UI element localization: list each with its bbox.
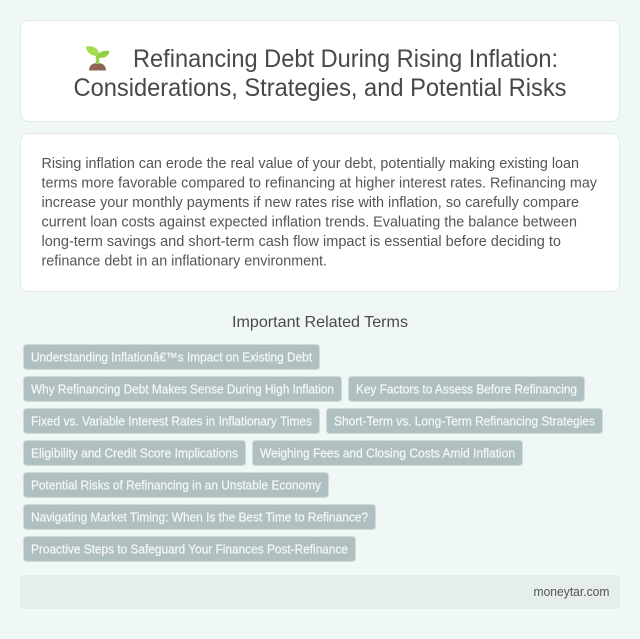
tag: eligibility (24, 440, 246, 466)
title text: Refinancing Debt During Rising Inflation: (133, 45, 558, 73)
summary paragraph: long-term savings and short-term cash flow impact is essential before deciding to (42, 233, 561, 250)
tag: proactive steps: Proactive Steps to Safeguard Your Finances Post-Refinance (31, 542, 348, 556)
panel: title card (20, 20, 620, 122)
tag: weighing fees: Weighing Fees and Closing Costs Amid Inflation (260, 446, 515, 460)
panel: related terms tags (24, 344, 602, 562)
icon: sprout (86, 46, 110, 70)
tag: key factors (348, 376, 584, 402)
tag: eligibility: Eligibility and Credit Score Implications (31, 446, 238, 460)
tag: fixed vs variable (24, 408, 320, 434)
summary paragraph: Rising inflation can erode the real value of your debt, potentially making existing loan (42, 155, 579, 172)
panel: summary card (20, 134, 620, 292)
tag: understanding inflation: Understanding Inflationâ€™s Impact on Existing Debt (31, 350, 312, 364)
tag: potential risks (24, 472, 328, 498)
summary paragraph: increase your monthly payments if new rates rise with inflation, so carefully compare (42, 194, 579, 211)
tag: fixed vs variable: Fixed vs. Variable Interest Rates in Inflationary Times (31, 414, 312, 428)
heading: important related terms: Important Related Terms (232, 314, 408, 331)
summary paragraph (42, 155, 597, 270)
tag: proactive steps (24, 536, 356, 562)
tag: why refinancing (24, 376, 342, 402)
footer bar: moneytar.com (534, 585, 610, 599)
summary paragraph: refinance debt in an inflationary environment. (42, 252, 327, 270)
tag: short vs long term (326, 408, 602, 434)
tag: understanding inflation (24, 344, 320, 370)
tag: navigating timing (24, 504, 376, 530)
title text: Considerations, Strategies, and Potential Risks (74, 74, 566, 102)
title text (74, 45, 566, 102)
tag: navigating timing: Navigating Market Timing: When Is the Best Time to Refinance? (31, 510, 368, 524)
footer bar (20, 575, 620, 609)
tag: short vs long term: Short-Term vs. Long-Term Refinancing Strategies (334, 414, 595, 428)
summary paragraph: current loan costs against expected inflation trends. Evaluating the balance between (42, 214, 577, 230)
tag: key factors: Key Factors to Assess Before Refinancing (356, 382, 577, 396)
summary paragraph: terms more favorable compared to refinancing at higher interest rates. Refinancing may (42, 174, 597, 192)
tag: why refinancing: Why Refinancing Debt Makes Sense During High Inflation (31, 382, 334, 396)
tag: weighing fees (252, 440, 522, 466)
tag: potential risks: Potential Risks of Refinancing in an Unstable Economy (31, 478, 322, 492)
